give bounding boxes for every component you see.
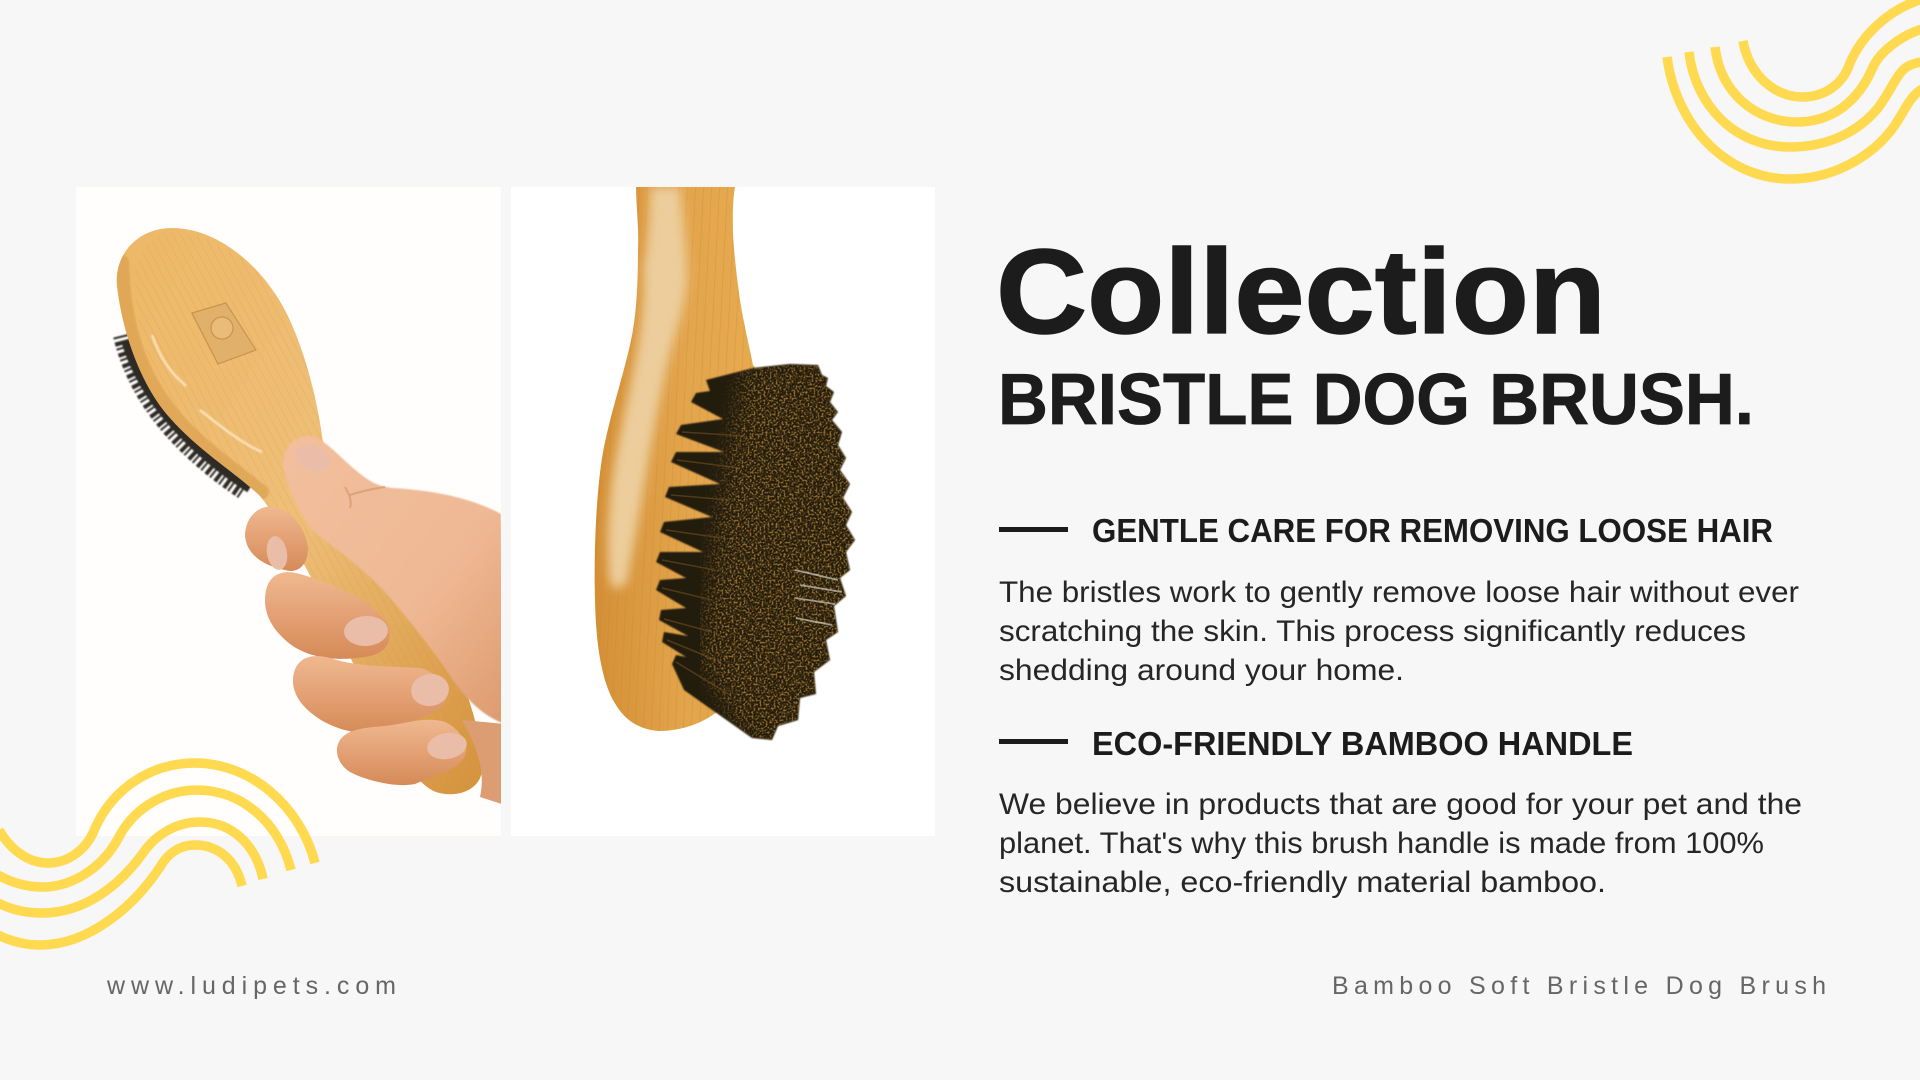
title [996,225,1754,440]
brush bristles, side view [124,335,250,490]
section: gentle care [999,512,1799,687]
finger: ring [293,656,446,734]
paragraph: planet. That's why this brush handle is made from 100% [999,827,1764,860]
section: eco-friendly [999,725,1802,899]
paragraph: We believe in products that are good for your pet and the [999,788,1802,821]
decorative wave: top right [1667,0,1920,179]
finger: index [245,507,308,571]
footer: product name: Bamboo Soft Bristle Dog Brush [1332,972,1826,1000]
paragraph: The bristles work to gently remove loose hair without ever [999,576,1799,609]
footer: website: www.ludipets.com [106,972,396,1000]
finger: middle [265,572,390,659]
subtitle: BRISTLE DOG BRUSH. [998,360,1754,440]
paragraph [999,576,1799,687]
finger: little [337,720,466,785]
hand: palm and wrist [245,436,505,805]
brand stamp on the head [192,303,256,364]
heading: ECO-FRIENDLY BAMBOO HANDLE [1092,725,1633,762]
heading: GENTLE CARE FOR REMOVING LOOSE HAIR [1092,512,1773,549]
panel: photo of brush held in hand [112,228,501,804]
paragraph: shedding around your home. [999,654,1404,687]
panel: close-up photo of brush bristles [594,187,856,741]
decorative wave: bottom left [0,763,315,945]
fingernails [264,440,469,762]
paragraph: sustainable, eco-friendly material bamboo. [999,866,1606,899]
brush head and handle [117,228,482,794]
bristles with tapered tufts [656,360,870,750]
title: Collection [996,225,1606,359]
bamboo handle [594,187,756,731]
paragraph [999,788,1802,899]
paragraph: scratching the skin. This process significantly reduces [999,615,1746,648]
